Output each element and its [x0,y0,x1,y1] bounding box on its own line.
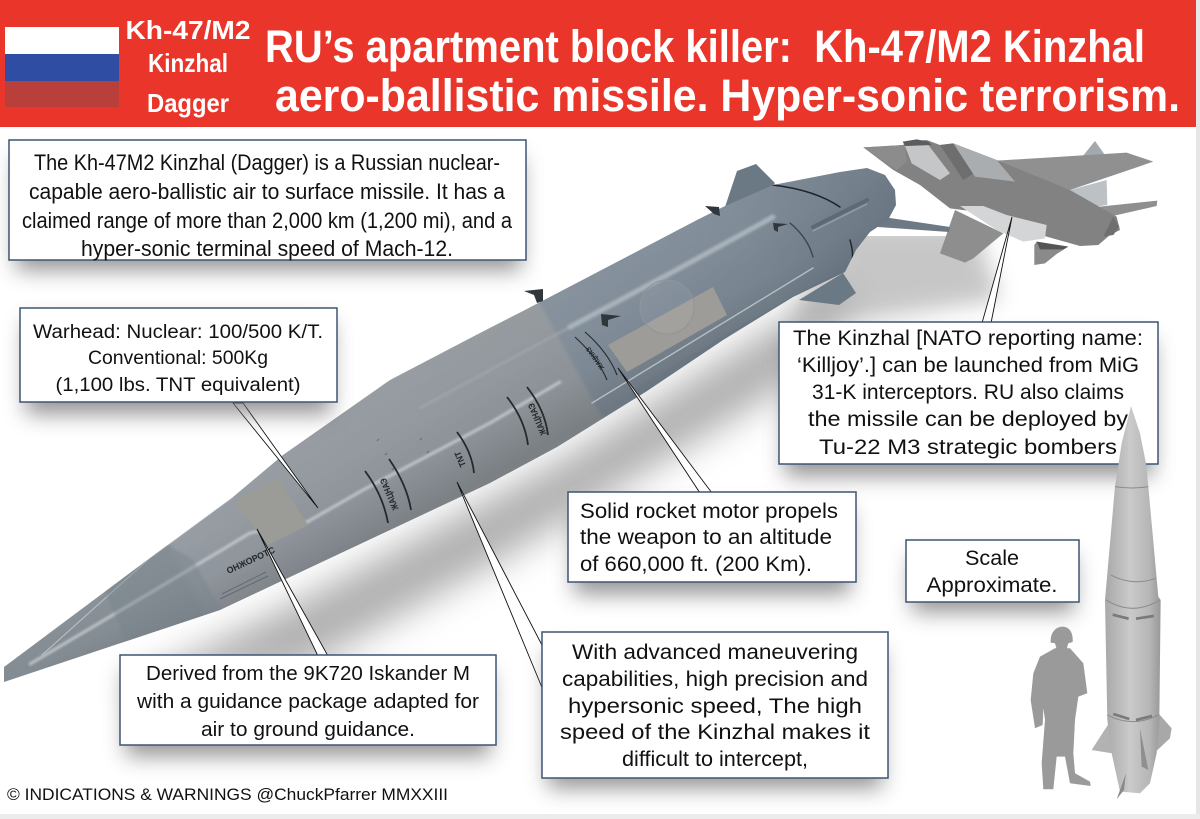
text box: scale note [906,540,1079,602]
hull fine print [220,438,429,599]
pointer: aircraft [982,217,1012,323]
hull stencilled text [225,345,607,576]
missile hull [4,168,896,682]
pointer: guidance [257,529,328,656]
hull stencilled text: ЖАЦНАЭ [526,401,549,438]
text box: maneuvering: With advanced maneuvering [572,641,858,664]
pointer: solid rocket motor [618,368,712,493]
text box: overview: hyper-sonic terminal speed of Mach-12. [81,236,453,261]
footer credit: © INDICATIONS & WARNINGS @ChuckPfarrer MMXXIII [7,785,448,804]
scale figure: soldier silhouette [1031,627,1091,789]
title [265,21,1180,121]
text box: launch platforms: the missile can be deployed by [808,408,1129,431]
hull stencilled text: ТNТ [452,449,468,468]
text box: launch platforms: ‘Killjoy’.] can be launched from MiG [797,354,1139,377]
header banner [0,0,1196,127]
banner side label [126,15,250,118]
hull markings [365,332,617,523]
text box: overview: claimed range of more than 2,000 km (1,200 mi), and a [22,208,513,233]
text box: solid rocket motor [568,492,856,582]
text box: maneuvering: hypersonic speed, The high [568,695,862,718]
box shadows [16,158,1153,788]
text box: scale note: Approximate. [926,574,1058,597]
nose section shading [106,544,220,641]
scale figure: upright missile [1092,406,1172,799]
text box: Iskander derivation [120,655,496,745]
text box: maneuvering [542,632,888,778]
text box: maneuvering: speed of the Kinzhal makes it [560,721,870,744]
text box: warhead: (1,100 lbs. TNT equivalent) [56,375,300,396]
text box: scale note: Scale [965,547,1019,570]
text box: overview: The Kh-47M2 Kinzhal (Dagger) is a Russian nuclear- [34,150,500,175]
text box: overview: capable aero-ballistic air to surface missile. It has a [29,179,506,204]
hull stencilled text: ЖАЦНАЭ [378,476,401,513]
missile: Kh-47M2 Kinzhal body [4,164,950,682]
hull highlights and rail [30,185,867,664]
callout pointers [233,217,1012,690]
hull stencilled text: ОНЖОРОТС [225,545,277,576]
banner side label: Dagger [147,88,229,118]
banner side label: Kh-47/M2 [126,15,250,45]
pointer: maneuvering [457,482,543,690]
text box: warhead [20,308,337,402]
text box: Iskander derivation: air to ground guidance. [201,719,415,741]
text box: maneuvering: capabilities, high precision and [562,668,868,691]
text box: launch platforms [779,322,1158,464]
grey decal panels [234,280,727,545]
text box: warhead: Warhead: Nuclear: 100/500 K/T. [33,322,323,343]
title: aero-ballistic missile. Hyper-sonic terrorism. [275,70,1180,121]
text box: Iskander derivation: with a guidance package adapted for [136,691,479,713]
lugs on the hull [524,206,788,327]
text box: warhead: Conventional: 500Kg [88,348,268,369]
pointer: warhead [233,403,318,508]
text box: launch platforms: 31-K interceptors. RU also claims [812,381,1124,404]
text box: solid rocket motor: the weapon to an altitude [580,526,832,549]
text box: launch platforms: Tu-22 M3 strategic bombers [819,436,1117,459]
text box: solid rocket motor: of 660,000 ft. (200 Km). [580,553,812,576]
text box: maneuvering: difficult to intercept, [622,748,808,771]
aircraft: MiG-31K carrying the missile [863,139,1157,265]
text box: solid rocket motor: Solid rocket motor propels [580,500,838,523]
text box: Iskander derivation: Derived from the 9K720 Iskander M [146,663,470,685]
text box: launch platforms: The Kinzhal [NATO reporting name: [793,327,1143,350]
hull stencilled text: ЖАЦНАЭ [585,345,607,371]
missile and aircraft shadows [148,236,1006,654]
text box: overview [9,140,526,261]
icon: Russian flag [5,27,119,107]
rear fins and strut [724,164,950,305]
banner side label: Kinzhal [148,48,228,78]
